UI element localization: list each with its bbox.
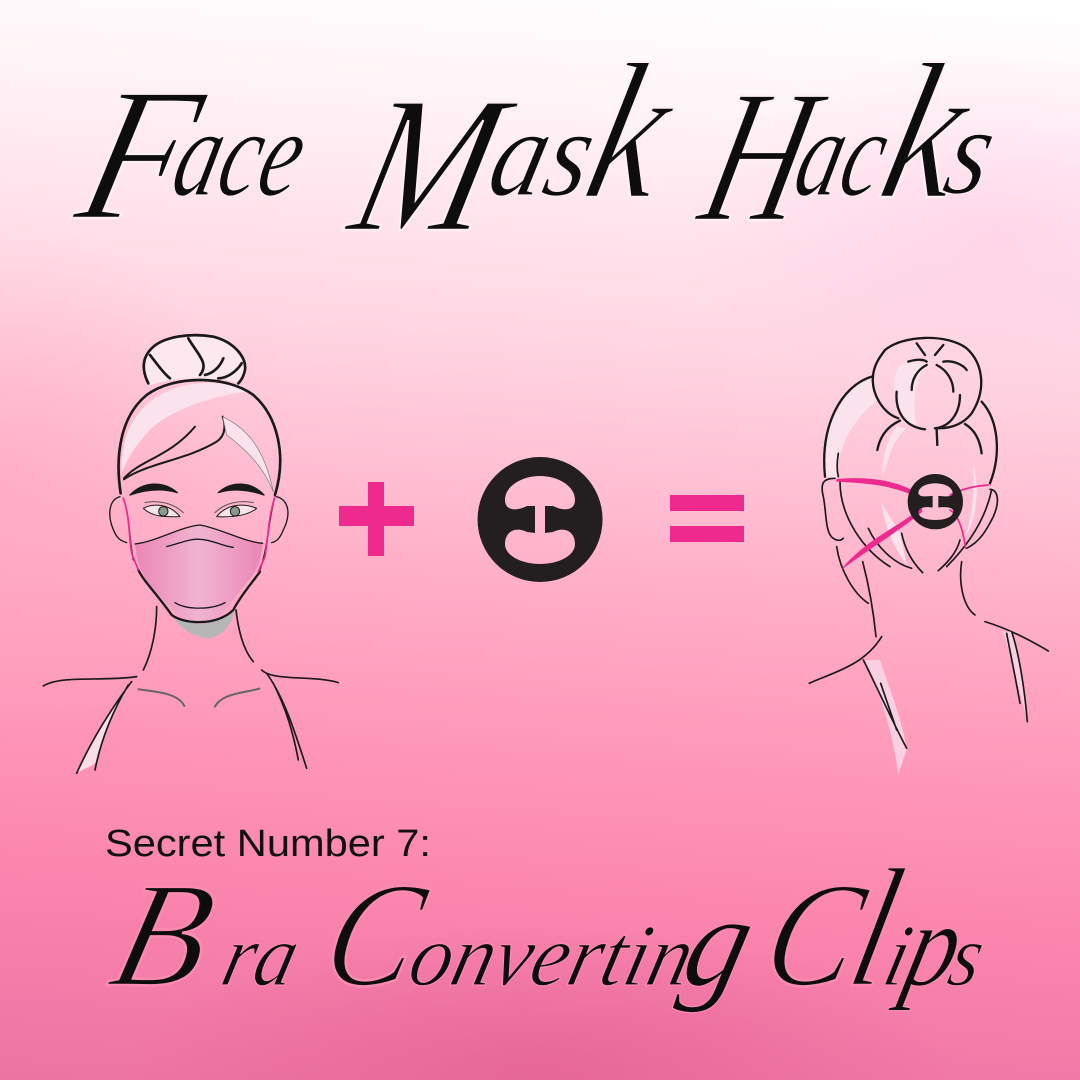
- neck and shoulders: [837, 547, 975, 637]
- pink ear loops: [123, 497, 275, 572]
- head outline: [119, 380, 280, 495]
- ears: [110, 497, 288, 543]
- head outline: [824, 338, 997, 483]
- title: ac: [783, 85, 903, 223]
- title: M: [332, 57, 531, 272]
- eyes: [143, 502, 257, 517]
- neck and shoulders: [143, 607, 253, 670]
- heading: bra converting clips: C: [750, 851, 881, 1017]
- title: [60, 24, 1010, 272]
- hair highlight: [122, 383, 248, 473]
- illustration: woman back view with clip: [809, 338, 1048, 774]
- title: k: [569, 24, 696, 239]
- pink mask straps: [837, 478, 920, 497]
- heading: bra converting clips: l: [836, 834, 918, 1022]
- title: H: [683, 51, 841, 261]
- title: k: [864, 24, 993, 239]
- hairline at nape: [837, 453, 992, 573]
- title: as: [477, 85, 610, 223]
- heading: bra converting clips: s: [940, 907, 994, 1005]
- title: s: [933, 83, 1010, 221]
- icon: bra converting clip: [478, 457, 603, 582]
- hair highlights: [825, 377, 877, 478]
- hair sweep lines: [124, 417, 224, 479]
- eyebrows: [130, 484, 264, 495]
- heading: bra converting clips: i: [875, 907, 921, 1005]
- ears: [822, 478, 997, 548]
- equals sign: [670, 495, 744, 542]
- chin shadow: [172, 612, 235, 638]
- text: secret number: Secret Number 7:: [105, 823, 431, 865]
- title: F: [60, 49, 221, 259]
- heading: bra converting clips: p: [887, 879, 977, 1012]
- heading: bra converting clips: [97, 834, 994, 1022]
- illustration: woman front view wearing mask: [43, 335, 338, 773]
- clip on strap: [908, 474, 963, 529]
- heading: bra converting clips: onvertin: [400, 907, 704, 1005]
- heading: bra converting clips: ra: [213, 907, 309, 1005]
- heading: bra converting clips: C: [310, 851, 441, 1017]
- hair bun: [873, 338, 981, 428]
- title: ace: [161, 85, 321, 223]
- bun: [144, 335, 245, 385]
- heading: bra converting clips: g: [671, 869, 769, 1014]
- heading: bra converting clips: B: [97, 851, 230, 1017]
- plus sign: [339, 482, 414, 556]
